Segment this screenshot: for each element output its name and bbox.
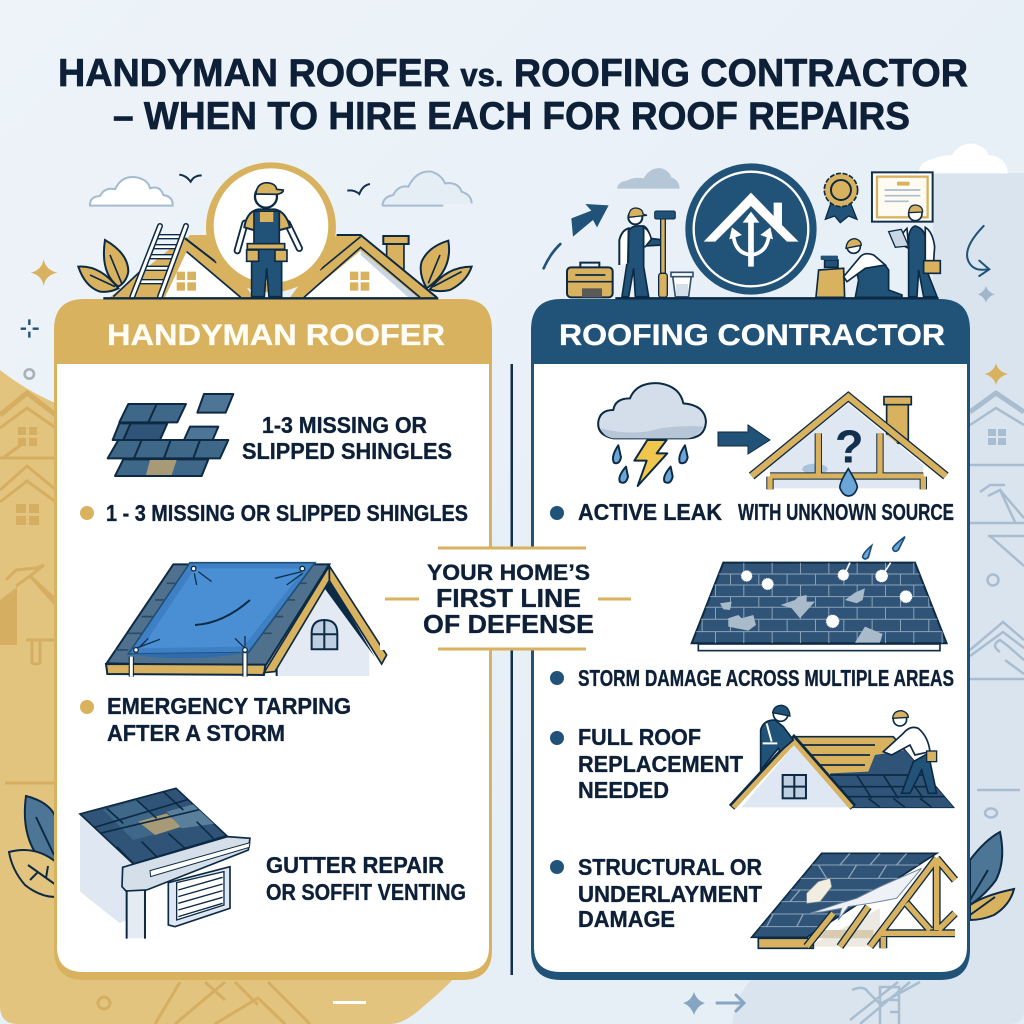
illustration: handyman on rooftops — [21, 162, 472, 379]
divider between panels — [510, 364, 513, 975]
text: active leak — [550, 499, 954, 525]
callout: your home's first line of defense — [380, 548, 644, 650]
title: HANDYMAN ROOFER vs. ROOFING CONTRACTOR — [58, 52, 968, 95]
bullet: missing shingles: 1 - 3 MISSING OR SLIPPED SHINGLES — [106, 500, 468, 526]
icon: left-hand leaves — [9, 796, 56, 897]
arrow: storm to attic — [718, 425, 770, 454]
text: active leak: WITH UNKNOWN SOURCE — [738, 499, 954, 525]
callout: your home's first line of defense: YOUR HOME’S — [427, 560, 590, 585]
callout: your home's first line of defense: FIRST LINE — [436, 583, 581, 613]
text: emergency tarping: EMERGENCY TARPING — [107, 693, 351, 719]
callout: your home's first line of defense: OF DEFENSE — [423, 609, 594, 639]
heading: roofing contractor: ROOFING CONTRACTOR — [559, 319, 945, 352]
text: gutter repair: GUTTER REPAIR — [266, 852, 444, 878]
icon: attic with leak and question mark — [752, 397, 946, 496]
text: structural or underlayment damage: DAMAGE — [578, 906, 675, 932]
text: emergency tarping: AFTER A STORM — [107, 720, 285, 746]
icon: storm damaged roof — [687, 537, 953, 651]
icon: attic with leak and question mark: ? — [835, 421, 863, 473]
icon: right-hand leaves — [970, 832, 1014, 920]
text: structural or underlayment damage — [550, 854, 762, 932]
icon: missing shingles — [108, 394, 233, 476]
title: – WHEN TO HIRE EACH FOR ROOF REPAIRS — [113, 95, 910, 138]
text: structural or underlayment damage: UNDERLAYMENT — [578, 881, 762, 907]
text: gutter repair — [266, 852, 466, 905]
heading: handyman roofer: HANDYMAN ROOFER — [107, 319, 445, 352]
text: structural or underlayment damage: STRUCTURAL OR — [578, 854, 762, 880]
text: full roof replacement: FULL ROOF — [578, 724, 701, 750]
text: missing or slipped shingles caption: 1-3 MISSING OR — [262, 412, 427, 438]
icon: crew replacing roof — [732, 705, 960, 810]
panel: roofing contractor — [531, 299, 970, 980]
text: full roof replacement — [550, 724, 743, 803]
text: missing or slipped shingles caption: SLIPPED SHINGLES — [242, 438, 452, 464]
title — [58, 52, 968, 138]
background: gold blob with house outlines — [0, 370, 470, 1024]
text: emergency tarping — [80, 693, 351, 746]
icon: storm cloud with rain and lightning — [598, 383, 706, 486]
icon: gutter and soffit vent — [80, 788, 250, 939]
icon: emergency tarp on roof — [106, 563, 387, 677]
background: pale blue right panel with tool outlines — [732, 173, 1024, 1024]
panel: handyman roofer — [54, 299, 492, 980]
text: full roof replacement: NEEDED — [578, 777, 669, 803]
text: active leak: ACTIVE LEAK — [578, 499, 722, 525]
illustration: contractor crew and badge — [544, 144, 1008, 385]
text: missing or slipped shingles caption — [242, 412, 452, 464]
icon: exposed trusses and torn underlayment — [740, 853, 955, 948]
text: gutter repair: OR SOFFIT VENTING — [266, 879, 466, 905]
text: full roof replacement: REPLACEMENT — [578, 751, 743, 777]
footer sparkle and arrow — [683, 992, 744, 1015]
